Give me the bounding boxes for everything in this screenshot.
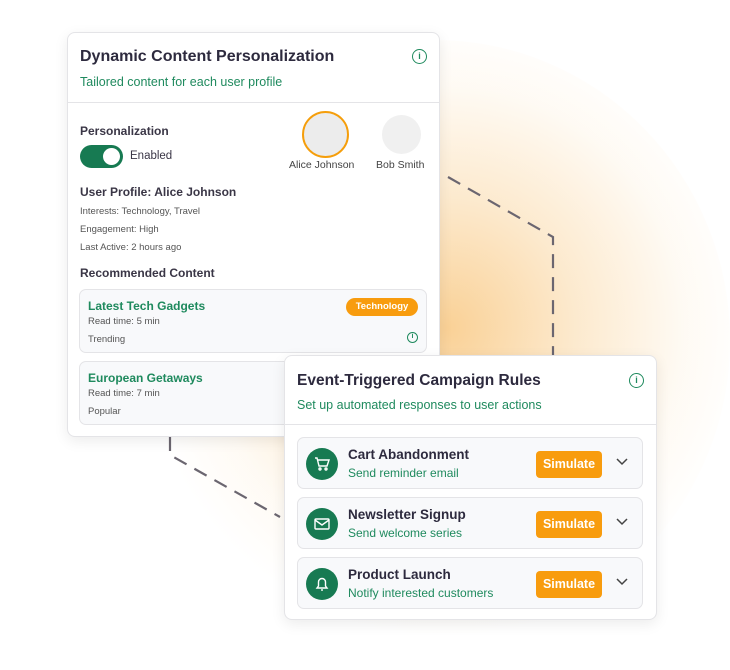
personalization label: Personalization [80, 124, 169, 138]
content card: tech gadgets: Trending [88, 334, 125, 345]
rule: newsletter signup: Send welcome series [348, 526, 462, 540]
rule: cart abandonment: Cart Abandonment [348, 447, 469, 462]
rule: product launch [297, 557, 643, 609]
subtitle: Set up automated responses to user actions [297, 398, 542, 412]
rule: cart abandonment: Simulate [543, 457, 595, 471]
content card: tech gadgets: Read time: 5 min [88, 316, 160, 327]
rule: cart abandonment: Send reminder email [348, 466, 459, 480]
content card: european getaways [79, 361, 427, 425]
icon: info: i [635, 375, 638, 385]
content card: european getaways: European Getaways [88, 371, 203, 385]
rule: cart abandonment [297, 437, 643, 489]
content card: tech gadgets: Latest Tech Gadgets [88, 299, 205, 313]
panel: dynamic content personalization [67, 32, 440, 437]
rule: newsletter signup [297, 497, 643, 549]
icon: info: i [418, 51, 421, 61]
rule: product launch: Simulate [543, 577, 595, 591]
rule: product launch: Product Launch [348, 567, 451, 582]
rule: newsletter signup: Newsletter Signup [348, 507, 466, 522]
avatar: bob [382, 115, 421, 154]
rule: newsletter signup: Simulate [543, 517, 595, 531]
toggle [80, 145, 123, 168]
subtitle: Tailored content for each user profile [80, 75, 282, 89]
toggle label: Enabled [130, 150, 172, 162]
panel: event-triggered campaign rules [284, 355, 657, 620]
avatar: alice [302, 111, 349, 158]
content card: tech gadgets: i [412, 333, 413, 340]
user profile: User Profile: Alice Johnson [80, 185, 236, 199]
icon: info [629, 373, 644, 388]
content card: european getaways: Read time: 7 min [88, 388, 160, 399]
heading: Event-Triggered Campaign Rules [297, 372, 541, 389]
user profile: Last Active: 2 hours ago [80, 242, 181, 253]
content card: european getaways: Popular [88, 406, 121, 417]
content card: tech gadgets [79, 289, 427, 353]
user profile: Engagement: High [80, 224, 159, 235]
user profile: Interests: Technology, Travel [80, 206, 200, 217]
recommended content heading: Recommended Content [80, 266, 215, 280]
rule: product launch: Notify interested customers [348, 586, 493, 600]
user profile [80, 185, 236, 253]
icon: info [412, 49, 427, 64]
panel: dynamic content personalization: Bob Smith [376, 159, 424, 171]
content card: tech gadgets: Technology [356, 301, 408, 312]
panel: dynamic content personalization: Alice Johnson [289, 159, 354, 171]
heading: Dynamic Content Personalization [80, 48, 334, 65]
